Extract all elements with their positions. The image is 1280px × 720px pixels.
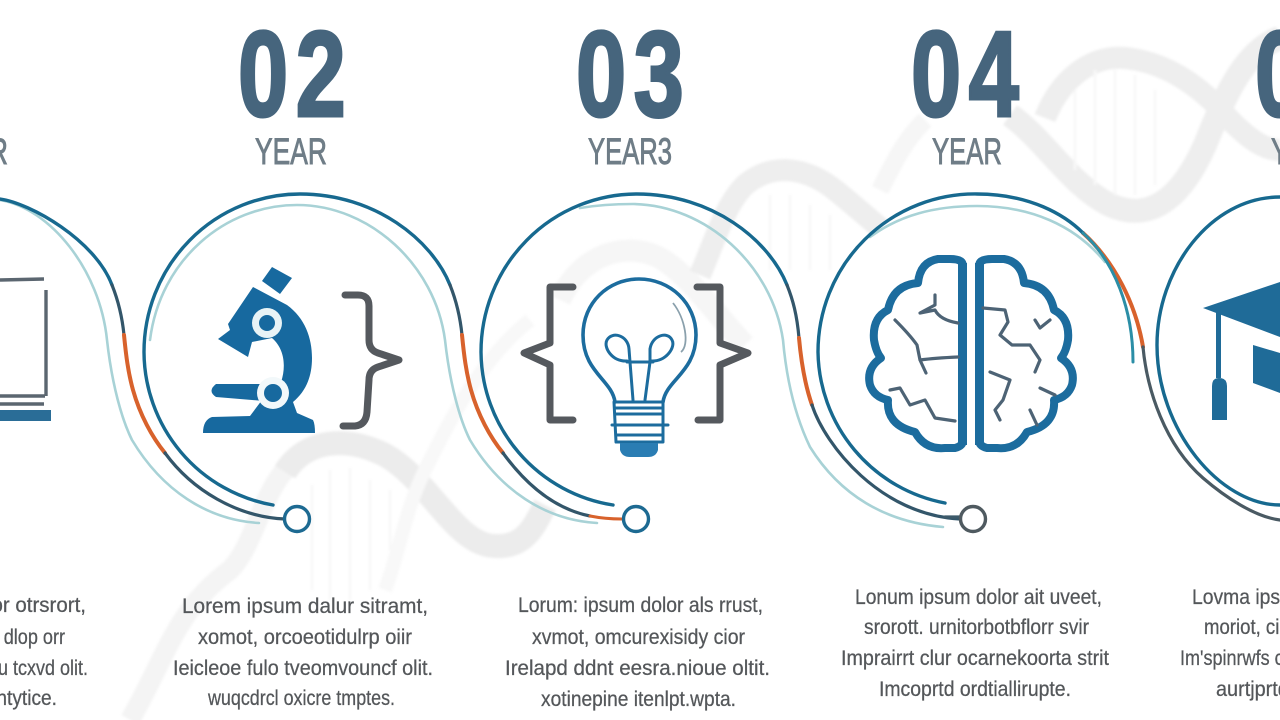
- spiral connector: step 4: [818, 194, 1280, 520]
- body text: step 5: [1180, 586, 1280, 701]
- icon: light bulb: [583, 279, 696, 457]
- step 2: microscope: [144, 6, 622, 710]
- icon: right brace: [343, 295, 399, 426]
- spiral connector: step 2: [144, 194, 622, 523]
- body text: step 3: Irelapd ddnt eesra.nioue oltit.: [505, 657, 770, 680]
- body text: step 2: Lorem ipsum dalur sitramt,: [182, 595, 428, 618]
- number 04: 04: [911, 6, 1026, 142]
- step 3: light bulb: [481, 6, 960, 711]
- body text: step 2: xomot, orcoeotidulrp oiir: [198, 626, 412, 649]
- step 5: graduation cap, cropped at right edge: [1157, 6, 1280, 701]
- number 02: 02: [238, 6, 353, 142]
- heading: year 3 label: YEAR3: [588, 131, 672, 172]
- icon: brain: [869, 259, 1073, 448]
- icon: left bracket: [524, 287, 573, 420]
- step 4: brain: [818, 6, 1280, 701]
- number 03: 03: [576, 6, 691, 142]
- heading: year 2 label: YEAR: [255, 131, 327, 172]
- body text: step 4: srorott. urnitorbotbflorr svir: [864, 616, 1089, 639]
- node: step 2: [284, 506, 310, 532]
- icon: book: [0, 279, 51, 421]
- icon: graduation cap: [1203, 282, 1280, 420]
- node: step 4: [945, 506, 986, 532]
- body text: step 4: Imcoprtd ordtiallirupte.: [879, 678, 1071, 701]
- body text: step 3: Lorum: ipsum dolor als rrust,: [518, 594, 763, 617]
- heading: year 4 label: YEAR: [932, 131, 1002, 172]
- body text: step 4: [841, 586, 1109, 701]
- node: step 3: [624, 506, 648, 532]
- body text: step 2: [173, 595, 433, 710]
- spiral connector: step 5: [1157, 197, 1280, 505]
- spiral connector: step 1: [0, 199, 285, 523]
- icon: microscope: [203, 267, 315, 433]
- body text: step 1: [0, 594, 88, 710]
- body text: step 3: xotinepine itenlpt.wpta.: [541, 688, 736, 711]
- body text: step 3: [505, 594, 770, 711]
- body text: step 4: Lonum ipsum dolor ait uveet,: [855, 586, 1102, 609]
- body text: step 2: wuqcdrcl oxicre tmptes.: [207, 687, 395, 710]
- spiral connector: step 3: [481, 194, 960, 527]
- icon: right bracket: [697, 287, 748, 420]
- body text: step 2: Ieicleoe fulo tveomvouncf olit.: [173, 657, 433, 680]
- step 1: partly cropped year: [0, 131, 285, 710]
- body text: step 4: Imprairrt clur ocarnekoorta strit: [841, 647, 1109, 670]
- body text: step 3: xvmot, omcurexisidy cior: [532, 626, 745, 649]
